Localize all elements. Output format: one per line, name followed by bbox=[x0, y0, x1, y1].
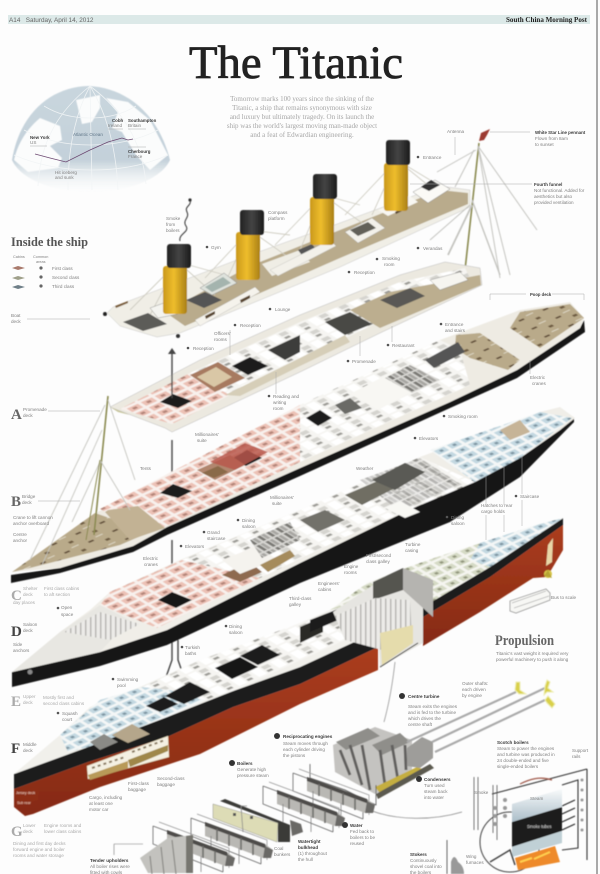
newspaper header strip: South China Morning Post bbox=[506, 17, 588, 24]
ship callout labels: motor car bbox=[89, 807, 109, 812]
ship callout labels: galley bbox=[289, 602, 302, 607]
propulsion callouts: Tender upholders bbox=[90, 858, 129, 863]
ship callout labels: Officers' bbox=[214, 331, 231, 336]
deck labels: anchors bbox=[13, 648, 30, 653]
engine room cutaway bbox=[333, 570, 433, 667]
ship layer: F hull with red lower section: Jersey deck bbox=[16, 791, 35, 795]
deck labels: G bbox=[11, 824, 23, 840]
ship callout labels: Millionaires' bbox=[195, 432, 219, 437]
propulsion callouts: single-ended boilers bbox=[497, 764, 539, 769]
ship callout labels: Elevators bbox=[419, 436, 439, 441]
deck labels: deck bbox=[23, 592, 33, 597]
deck labels: Engine rooms and bbox=[44, 823, 82, 828]
deck labels: Mostly first and bbox=[43, 695, 74, 700]
ship callout labels: Smoking room bbox=[448, 414, 478, 419]
intro text bbox=[227, 95, 377, 139]
title: The Titanic bbox=[189, 37, 403, 89]
smoke squiggle bbox=[180, 200, 190, 241]
ship callout labels: Entrance bbox=[423, 155, 442, 160]
globe map of route: New York bbox=[30, 135, 50, 140]
ship callout labels: baggage bbox=[157, 782, 175, 787]
deck labels bbox=[11, 313, 100, 858]
deck labels: D bbox=[11, 624, 22, 640]
ship callout labels: saloon bbox=[229, 630, 243, 635]
connector arrows through decks bbox=[165, 348, 185, 695]
ship callout labels: writing bbox=[273, 400, 287, 405]
graticule bbox=[14, 86, 168, 190]
ship callout labels: saloon bbox=[242, 524, 256, 529]
ship layer: A promenade deck bbox=[110, 262, 482, 432]
deck labels: deck bbox=[11, 319, 21, 324]
coal bunker block bbox=[213, 799, 303, 842]
ship callout labels: Turbine bbox=[405, 542, 421, 547]
ship layer: B bridge deck bbox=[11, 302, 585, 583]
machinery: boilers row bbox=[153, 769, 375, 872]
propulsion callouts: Support bbox=[572, 748, 589, 753]
ship callout labels: White Star Line pennant bbox=[535, 130, 586, 135]
continents bbox=[14, 95, 168, 172]
deck labels: Dining and first day decks bbox=[13, 841, 66, 846]
deck labels: A bbox=[11, 407, 22, 423]
propulsion heading and text bbox=[495, 633, 569, 662]
propulsion callouts: rails bbox=[572, 754, 581, 759]
ship callout labels: cabins bbox=[318, 587, 332, 592]
deck labels: Boat bbox=[11, 313, 21, 318]
propulsion callouts: Steam bbox=[530, 796, 543, 801]
propeller shafts bbox=[407, 688, 545, 752]
propulsion callouts: by engine bbox=[462, 693, 482, 698]
ship callout labels: Third-class bbox=[289, 596, 312, 601]
propulsion callouts: shovel coal into bbox=[410, 864, 442, 869]
ship callout labels: Restaurant bbox=[392, 343, 415, 348]
ship callout labels: Antenna bbox=[447, 129, 465, 134]
cargo cutaway bbox=[87, 736, 169, 779]
legend: First class bbox=[52, 266, 73, 271]
propulsion callouts: Generate high bbox=[237, 767, 267, 772]
propulsion callouts: each cylinder driving bbox=[283, 747, 325, 752]
legend bbox=[12, 255, 80, 289]
ship callout labels: baths bbox=[185, 651, 197, 656]
deck labels: deck bbox=[23, 829, 33, 834]
legend: Third class bbox=[52, 284, 75, 289]
ship callout labels: Verandas bbox=[423, 246, 443, 251]
globe map of route: Southampton bbox=[128, 118, 157, 123]
ship callout labels: Dining bbox=[229, 624, 242, 629]
ship callout labels: from bbox=[166, 222, 175, 227]
propulsion callouts: pressure steam bbox=[237, 773, 269, 778]
propulsion callouts: furnaces bbox=[466, 860, 484, 865]
propulsion callouts: Water bbox=[350, 823, 363, 828]
globe map of route bbox=[12, 86, 170, 192]
newspaper header strip: A14 Saturday, April 14, 2012 bbox=[9, 17, 94, 24]
deck labels: Middle bbox=[23, 742, 37, 747]
ship callout labels: Electric bbox=[530, 375, 546, 380]
deck labels: deck bbox=[22, 500, 32, 505]
ship callout labels: Lounge bbox=[275, 307, 291, 312]
ship callout labels: staircase bbox=[207, 536, 226, 541]
propulsion callouts: boilers to be bbox=[350, 835, 375, 840]
deck labels: rooms and water storage bbox=[13, 853, 64, 858]
ship callout labels: court bbox=[62, 717, 73, 722]
ship callout labels: platform bbox=[268, 216, 285, 221]
ship callout labels: Promenade bbox=[352, 359, 376, 364]
ship callout labels: Grand bbox=[207, 530, 220, 535]
ship callout labels: Flown from 8am bbox=[535, 136, 568, 141]
propulsion callouts: reused bbox=[350, 841, 364, 846]
deck labels: Open bbox=[61, 605, 73, 610]
ship callout labels: saloon bbox=[451, 521, 465, 526]
ship callout labels: Hatches to rear bbox=[481, 503, 513, 508]
bus to scale icon bbox=[510, 589, 550, 613]
propulsion callouts: Watertight bbox=[298, 839, 321, 844]
ship callout labels: bunkers bbox=[274, 852, 291, 857]
ship callout labels: boilers bbox=[166, 228, 180, 233]
ship callout labels: Electric bbox=[143, 556, 159, 561]
propulsion callouts: steam back bbox=[424, 789, 448, 794]
ship callout labels: Tents bbox=[140, 466, 152, 471]
propulsion callouts: Boilers bbox=[237, 761, 253, 766]
intro text: and luxury but ultimately tragedy. On its launch the bbox=[230, 113, 374, 121]
deck labels: Upper bbox=[23, 694, 36, 699]
ship callout labels: Engine bbox=[344, 564, 359, 569]
forward deck floor bbox=[14, 585, 378, 774]
ship callout labels: Smoking bbox=[382, 256, 400, 261]
ship callout labels: provided ventilation bbox=[534, 200, 574, 205]
deck labels: deck bbox=[23, 748, 33, 753]
ship callout labels: Gym bbox=[211, 245, 221, 250]
ship callout labels: Reception bbox=[354, 270, 375, 275]
ship callout labels: cranes bbox=[532, 381, 546, 386]
globe map of route: Cobh bbox=[112, 118, 124, 123]
ship callout labels: Reading and bbox=[273, 394, 299, 399]
deck labels: E bbox=[11, 694, 21, 710]
hull band bbox=[11, 320, 585, 583]
ship callout labels: Turkish bbox=[185, 645, 200, 650]
condenser frame lines bbox=[310, 764, 376, 805]
legend: areas bbox=[36, 260, 46, 264]
deck labels: C bbox=[11, 588, 22, 604]
propulsion callouts: the pistons bbox=[283, 753, 306, 758]
ship callout labels: Dining bbox=[451, 515, 464, 520]
funnels bbox=[163, 140, 410, 314]
deck labels: space bbox=[61, 612, 74, 617]
ship callout labels: rooms bbox=[214, 337, 227, 342]
legend: Common bbox=[33, 255, 48, 259]
bow mast bbox=[94, 396, 108, 535]
propulsion callouts: the hull bbox=[298, 857, 313, 862]
deck labels: F bbox=[11, 741, 20, 757]
ship layer: F hull with red lower section: Sub rear bbox=[17, 801, 32, 805]
deck labels: to aft section bbox=[44, 592, 70, 597]
propulsion callouts: into water bbox=[424, 795, 444, 800]
globe map of route: France bbox=[128, 154, 143, 159]
deck labels: B bbox=[11, 494, 21, 510]
green/blue cabins aft bbox=[330, 518, 563, 610]
deck labels: forward engine and boiler bbox=[13, 847, 65, 852]
ship callout labels bbox=[57, 129, 586, 857]
deck labels: deck bbox=[23, 413, 33, 418]
legend: Cabins bbox=[13, 255, 25, 259]
newspaper header strip bbox=[8, 15, 590, 24]
ship callout labels: First-class bbox=[128, 781, 150, 786]
propulsion callouts: Centre turbine bbox=[408, 694, 440, 699]
globe map of route: Hit iceberg bbox=[55, 170, 77, 175]
ship callout labels: at least one bbox=[89, 801, 113, 806]
deck labels: Saloon bbox=[23, 622, 38, 627]
propellers bbox=[515, 680, 555, 708]
ship callout labels: Elevators bbox=[185, 544, 205, 549]
globe map of route: Ireland bbox=[108, 123, 122, 128]
deck labels: Crane to lift cannon bbox=[13, 515, 53, 520]
deck labels: Bridge bbox=[22, 494, 36, 499]
propulsion heading and text: powerful machinery to push it along bbox=[496, 657, 569, 662]
deck labels: lower class cabins bbox=[44, 829, 82, 834]
propulsion callouts bbox=[90, 681, 589, 874]
ship callout labels: Dining bbox=[242, 518, 255, 523]
intro text: Titanic, a ship that remains synonymous with size bbox=[232, 104, 372, 112]
ship callout labels: Fourth funnel bbox=[534, 182, 562, 187]
globe map of route: Britain bbox=[128, 123, 141, 128]
ship callout labels: First/second bbox=[366, 553, 391, 558]
globe map of route: US bbox=[30, 140, 36, 145]
ship callout labels: rooms bbox=[344, 570, 357, 575]
propulsion callouts: Smoke bbox=[474, 790, 489, 795]
rigging bbox=[130, 160, 440, 315]
propulsion heading and text: Titanic's vast weight it required very bbox=[496, 651, 569, 656]
propulsion callouts: Reciprocating engines bbox=[283, 734, 333, 739]
globe map of route: and sunk bbox=[55, 175, 74, 180]
ship callout labels: Cargo, including bbox=[89, 795, 123, 800]
ship callout labels: Staircase bbox=[520, 494, 540, 499]
deck labels: Side bbox=[13, 642, 23, 647]
ship callout labels: room bbox=[384, 262, 395, 267]
ship callout labels: Smoke bbox=[166, 216, 181, 221]
Scotch boiler cross-section: Smoke tubes bbox=[527, 824, 551, 829]
propulsion callouts: bulkhead bbox=[298, 845, 318, 850]
ship callout labels: Coal bbox=[274, 846, 283, 851]
tender spindles bundle bbox=[114, 835, 193, 874]
propulsion callouts: Stokers bbox=[410, 852, 427, 857]
propulsion callouts: each driven bbox=[462, 687, 486, 692]
deck labels: second class cabins bbox=[43, 701, 85, 706]
propulsion callouts: Wing bbox=[466, 854, 477, 859]
propulsion heading and text: Propulsion bbox=[495, 633, 555, 649]
ship callout labels: Not functional. Added for bbox=[534, 188, 585, 193]
ship callout labels: Reception bbox=[193, 346, 214, 351]
propulsion callouts: 24 double-ended and five bbox=[497, 758, 549, 763]
machinery: reciprocating engines and turbine bbox=[310, 680, 555, 805]
deck labels: First class cabins bbox=[44, 586, 80, 591]
ship callout labels: Reception bbox=[240, 323, 261, 328]
intro text: and a feat of Edwardian engineering. bbox=[250, 131, 354, 139]
ship callout labels: Bus to scale bbox=[551, 595, 576, 600]
superstructure bbox=[123, 313, 167, 331]
ship callout labels: aesthetics but also bbox=[534, 194, 572, 199]
deck labels: day places bbox=[13, 600, 36, 605]
ship callout labels: Millionaires' bbox=[270, 495, 294, 500]
intro text: Tomorrow marks 100 years since the sinking of the bbox=[230, 95, 374, 103]
propulsion callouts: Steam moves through bbox=[283, 741, 328, 746]
ship callout labels: cargo holds bbox=[481, 509, 505, 514]
propulsion callouts: Turn used bbox=[424, 783, 445, 788]
ship layer: C shelter deck (upper hull) bbox=[12, 407, 575, 687]
ship layer: boat deck bbox=[103, 140, 470, 338]
heading: Inside the ship: Inside the ship bbox=[11, 235, 88, 249]
red hull bbox=[14, 647, 378, 816]
globe map of route: Cherbourg bbox=[128, 149, 151, 154]
rear mast and rigging bbox=[430, 129, 537, 278]
ship callout labels: Weather bbox=[356, 466, 374, 471]
pennant bbox=[479, 129, 490, 141]
deck labels: Shelter bbox=[23, 586, 38, 591]
ship callout labels: Squash bbox=[62, 711, 78, 716]
globe map of route: Atlantic Ocean bbox=[73, 132, 103, 137]
ship callout labels: Compass bbox=[268, 210, 288, 215]
propulsion callouts: and turbine was produced in bbox=[497, 752, 555, 757]
legend: Second class bbox=[52, 275, 80, 280]
ship callout labels: to sunset bbox=[535, 142, 554, 147]
ship callout labels: baggage bbox=[128, 787, 146, 792]
ship layer: F hull with red lower section bbox=[14, 518, 563, 816]
route line bbox=[35, 138, 133, 162]
ship callout labels: Engineers' bbox=[318, 581, 340, 586]
propulsion callouts: Scotch boilers bbox=[497, 740, 529, 745]
Scotch boiler cross-section bbox=[447, 769, 587, 874]
ship callout labels: class galley bbox=[366, 559, 390, 564]
propulsion callouts: (1) throughout bbox=[298, 851, 328, 856]
propulsion callouts: Continuously bbox=[410, 858, 437, 863]
black band bbox=[14, 631, 378, 789]
propulsion callouts: Outer shafts: bbox=[462, 681, 488, 686]
deck labels: Promenade bbox=[23, 407, 47, 412]
ship callout labels: pool bbox=[117, 683, 126, 688]
tube plate dots bbox=[493, 778, 584, 832]
ship callout labels: cranes bbox=[144, 562, 158, 567]
deck labels: anchor bbox=[13, 538, 28, 543]
propulsion callouts: and is fed to the turbine bbox=[408, 710, 456, 715]
ship callout labels: Second-class bbox=[157, 776, 185, 781]
deck labels: Lower bbox=[23, 823, 36, 828]
arrow from engine room to machinery bbox=[384, 662, 395, 722]
ship callout labels: suite bbox=[197, 438, 207, 443]
ship callout labels: casing bbox=[405, 548, 419, 553]
deck labels: Centre bbox=[13, 532, 27, 537]
ship callout labels: room bbox=[273, 406, 284, 411]
ship callout labels: Entrance bbox=[445, 322, 464, 327]
draught marks bbox=[16, 787, 38, 806]
rudder bbox=[546, 538, 553, 566]
ship callout labels: suite bbox=[272, 501, 282, 506]
propulsion callouts: Condensers bbox=[424, 777, 451, 782]
deck labels: anchor overboard bbox=[13, 521, 49, 526]
deck labels: deck bbox=[23, 628, 33, 633]
propulsion callouts: which drives the bbox=[408, 716, 441, 721]
intro text: ship was the world's largest moving man-made object bbox=[227, 122, 377, 130]
propulsion callouts: Steam exits the engines bbox=[408, 704, 458, 709]
propulsion callouts: Steam to power the engines bbox=[497, 746, 555, 751]
deck labels: deck bbox=[23, 700, 33, 705]
ship callout labels: Poop deck bbox=[530, 292, 552, 297]
propulsion callouts: centre shaft bbox=[408, 722, 433, 727]
ship callout labels: and stairs bbox=[445, 328, 466, 333]
propulsion callouts: Fed back to bbox=[350, 829, 374, 834]
propulsion callouts: All boiler rises were bbox=[90, 864, 130, 869]
ship callout labels: Swimming bbox=[117, 677, 139, 682]
